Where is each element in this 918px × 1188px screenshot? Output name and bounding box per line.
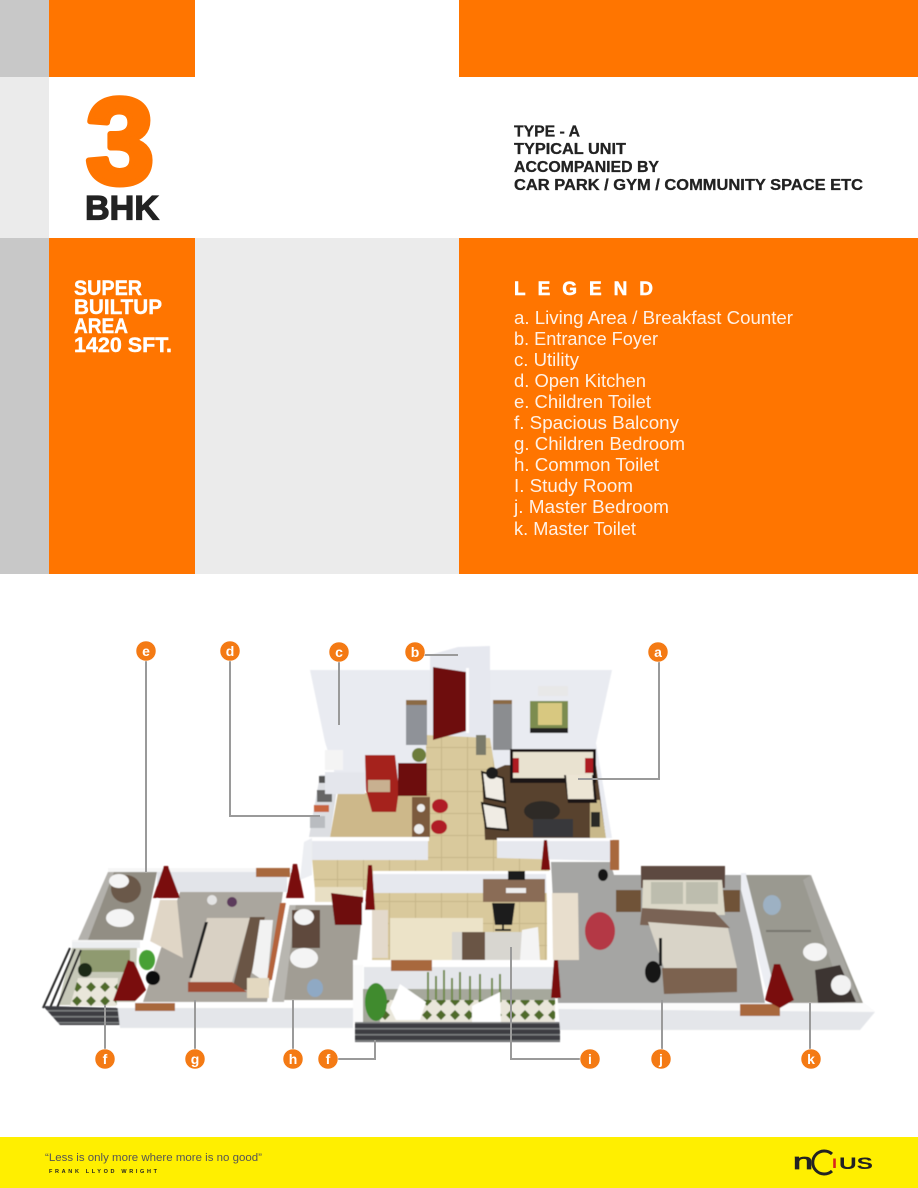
panel: super builtup area: 1420 SFT.	[74, 334, 172, 357]
heading: 3 BHK: BHK	[85, 190, 159, 228]
callout label e: e	[142, 643, 150, 659]
children bedroom g	[139, 892, 292, 1002]
panel: light grey middle	[195, 238, 459, 574]
study lower wall and door	[353, 960, 556, 1023]
text block: unit type: CAR PARK / GYM / COMMUNITY SPACE ETC	[514, 177, 863, 194]
callout label a: a	[654, 644, 662, 660]
panel: legend: e. Children Toilet	[514, 392, 651, 412]
callout label g: g	[191, 1051, 199, 1067]
callout label d	[220, 641, 240, 661]
logo: US	[839, 1154, 873, 1173]
panel: super builtup area: SUPER	[74, 277, 142, 300]
panel: super builtup area	[49, 238, 195, 574]
callout label f left	[95, 1049, 115, 1069]
top colour band	[0, 0, 918, 77]
callout lines	[105, 655, 810, 1059]
panel: legend: c. Utility	[514, 350, 579, 370]
logo	[793, 1149, 873, 1174]
heading: 3 BHK: 3	[86, 73, 154, 209]
callout label g	[185, 1049, 205, 1069]
panel: super builtup area: BUILTUP	[74, 296, 162, 319]
left light side strip	[0, 77, 49, 238]
panel: legend: d. Open Kitchen	[514, 371, 646, 391]
callout label i: i	[588, 1051, 592, 1067]
panel: grey side strip	[0, 238, 49, 574]
panel: legend: a. Living Area / Breakfast Counter	[514, 308, 793, 328]
common toilet h	[272, 893, 364, 1002]
panel: legend: I. Study Room	[514, 476, 633, 496]
callout label k	[801, 1049, 821, 1069]
callout label b	[405, 642, 425, 662]
panel: legend: g. Children Bedroom	[514, 434, 685, 454]
panel: legend: h. Common Toilet	[514, 455, 659, 475]
footer quote	[45, 1152, 262, 1175]
callout label f centre	[318, 1049, 338, 1069]
panel: legend: j. Master Bedroom	[513, 497, 669, 517]
callout label k: k	[807, 1051, 815, 1067]
living front wall	[497, 838, 612, 861]
callout label f left: f	[103, 1051, 108, 1067]
callout label b: b	[411, 644, 419, 660]
panel: legend: LEGEND	[514, 279, 653, 300]
master bedroom j	[551, 840, 765, 1003]
text block: unit type: ACCOMPANIED BY	[514, 159, 660, 176]
footer band	[0, 1137, 918, 1188]
panel: legend: k. Master Toilet	[514, 519, 636, 539]
left balcony f	[43, 942, 140, 1025]
callout label j: j	[658, 1051, 663, 1067]
panel: legend: f. Spacious Balcony	[514, 413, 679, 433]
logo: n	[793, 1149, 813, 1174]
foyer pale step	[315, 887, 363, 902]
entrance door	[433, 667, 466, 740]
callout label j	[651, 1049, 671, 1069]
text block: unit type: TYPE - A	[514, 124, 580, 140]
callout label h	[283, 1049, 303, 1069]
text block: unit type: TYPICAL UNIT	[514, 141, 627, 158]
callout label i	[580, 1049, 600, 1069]
kitchen floor and fittings	[309, 700, 448, 837]
children toilet e	[72, 872, 157, 945]
text block: unit type	[514, 124, 863, 194]
study room i	[362, 871, 558, 963]
central tile floor	[312, 735, 550, 890]
kitchen front wall	[300, 837, 429, 880]
panel: legend: b. Entrance Foyer	[514, 329, 658, 349]
children wing back wall	[108, 868, 298, 892]
callout label a	[648, 642, 668, 662]
red door panels	[113, 840, 794, 1008]
back walls	[310, 646, 612, 838]
panel: super builtup area: AREA	[74, 315, 128, 338]
callout label h: h	[289, 1051, 297, 1067]
callout label c	[329, 642, 349, 662]
callout label f centre: f	[326, 1051, 331, 1067]
floor plan illustration	[43, 646, 875, 1042]
master bedroom right wall	[741, 873, 778, 990]
front walls	[117, 1002, 875, 1030]
footer quote: “Less is only more where more is no good”	[45, 1152, 262, 1164]
centre balcony f	[355, 970, 560, 1042]
study back wall	[373, 871, 550, 893]
living room	[476, 686, 606, 840]
master toilet k	[746, 875, 863, 1003]
footer quote: FRANK LLYOD WRIGHT	[49, 1169, 158, 1175]
callout label e	[136, 641, 156, 661]
callout label d: d	[226, 643, 234, 659]
callout label c: c	[335, 644, 343, 660]
panel: legend	[459, 238, 918, 574]
logo: I	[832, 1155, 837, 1171]
